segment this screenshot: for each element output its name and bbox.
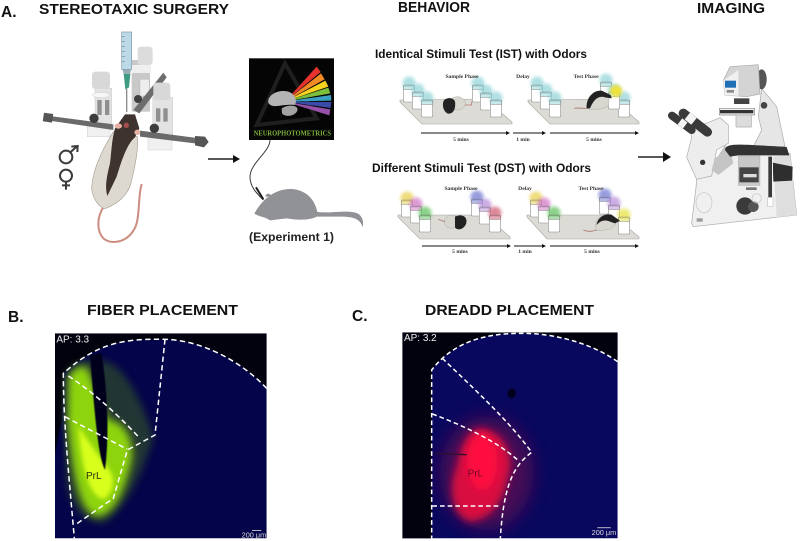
fiber track (90, 353, 107, 470)
control cluster (738, 156, 793, 207)
DST jars (400, 188, 630, 234)
fiber optic cable (250, 140, 270, 200)
arrow: surgery to recording (208, 155, 240, 163)
left column of frame (87, 72, 112, 137)
DST timeline arrows (422, 244, 639, 248)
base ornaments (696, 193, 761, 222)
panel: DST timeline scenes: Delay (518, 186, 532, 192)
logo wordmark: NEUROPHOTOMETRICS (254, 130, 331, 138)
IST time labels: 5 mins (453, 137, 470, 143)
label: AP 3.3: AP: 3.3 (56, 334, 90, 345)
stage ring (725, 145, 789, 157)
scale bar: 200 μm (592, 528, 616, 537)
base shaded side (773, 155, 797, 217)
green fluorescence (67, 367, 132, 517)
panel label: A: A. (1, 4, 16, 21)
heading: DST: Different Stimuli Test (DST) with Odors (372, 161, 591, 175)
region outlines (63, 339, 267, 538)
IST novel odor jar (608, 84, 622, 109)
bright red core (467, 433, 497, 490)
panel: DST timeline scenes: 5 mins (584, 249, 601, 255)
panel: IST timeline scenes: Test Phase (573, 74, 599, 80)
IST phase labels: Sample Phase (445, 74, 479, 80)
illustration: stereotaxic frame with rat (43, 32, 209, 242)
outside tissue dark region (402, 332, 618, 538)
patch cord tip (256, 187, 263, 199)
icon: female symbol (60, 170, 72, 190)
region outlines (432, 333, 618, 538)
label: AP 3.2: AP: 3.2 (404, 333, 437, 344)
IST test rat (574, 91, 612, 109)
fine dark streak (435, 453, 467, 455)
micrograph: fiber placement (55, 333, 267, 539)
scale bar: 200 μm (242, 530, 266, 539)
heading: stereotaxic surgery: STEREOTAXIC SURGERY (39, 2, 229, 18)
condenser and stage assembly (719, 98, 767, 127)
arrow: behavior to imaging (638, 152, 671, 162)
panel: IST timeline scenes (400, 74, 639, 143)
IST sample platform (400, 99, 512, 124)
heading: imaging: IMAGING (697, 1, 765, 17)
DST test platform (527, 215, 639, 239)
icon: male symbol (60, 146, 78, 163)
caption: experiment 1: (Experiment 1) (249, 232, 334, 244)
IST sample rat (443, 97, 472, 114)
panel: DST timeline scenes: 1 min (518, 249, 533, 255)
eyepiece head (672, 113, 733, 179)
syringe (122, 32, 132, 112)
DST phase labels: Sample Phase (444, 186, 478, 192)
label: PrL: PrL (468, 469, 484, 480)
mouse (254, 189, 363, 227)
label: PrL: PrL (86, 471, 102, 482)
heading: behavior: BEHAVIOR (398, 0, 470, 16)
DST test rat (583, 214, 620, 231)
rat tail (98, 184, 142, 242)
microscope rear arm (753, 88, 785, 147)
heading: IST: Identical Stimuli Test (IST) with Odors (375, 47, 587, 61)
logo box (249, 58, 334, 140)
DST sample platform (398, 215, 510, 239)
heading: dreadd placement: DREADD PLACEMENT (425, 303, 594, 319)
panel: IST timeline scenes: 1 min (516, 137, 531, 143)
dim green halo (65, 360, 153, 523)
red fluorescence (452, 428, 511, 522)
focus knob (736, 197, 759, 215)
back column of frame (132, 47, 153, 112)
DST time labels: 5 mins (452, 249, 469, 255)
diagonal ear bar (133, 73, 167, 113)
IST timeline arrows (421, 131, 639, 135)
illustration: inverted microscope (672, 65, 797, 227)
IST test platform (528, 99, 639, 124)
horizontal bars (43, 113, 209, 147)
lamp housing (723, 65, 767, 97)
DST sample rat (438, 215, 466, 229)
panel label: B: B. (8, 309, 24, 326)
outside tissue dark region (55, 333, 267, 453)
dark vessel mark (508, 388, 516, 398)
IST jars (402, 74, 630, 117)
heading: fiber placement: FIBER PLACEMENT (87, 303, 238, 319)
micrograph: DREADD placement (402, 332, 618, 538)
panel: DST timeline scenes: Test Phase (578, 186, 604, 192)
bright green core (78, 427, 113, 499)
panel label: C: C. (352, 308, 368, 325)
dim red halo (440, 417, 533, 530)
panel: IST timeline scenes: 5 mins (586, 137, 603, 143)
microscope base (692, 150, 797, 227)
illustration: neurophotometrics recording (249, 58, 363, 227)
panel: DST timeline scenes (398, 186, 639, 255)
rat body (92, 114, 140, 209)
panel: IST timeline scenes: Delay (516, 74, 530, 80)
right column of frame (148, 83, 173, 150)
